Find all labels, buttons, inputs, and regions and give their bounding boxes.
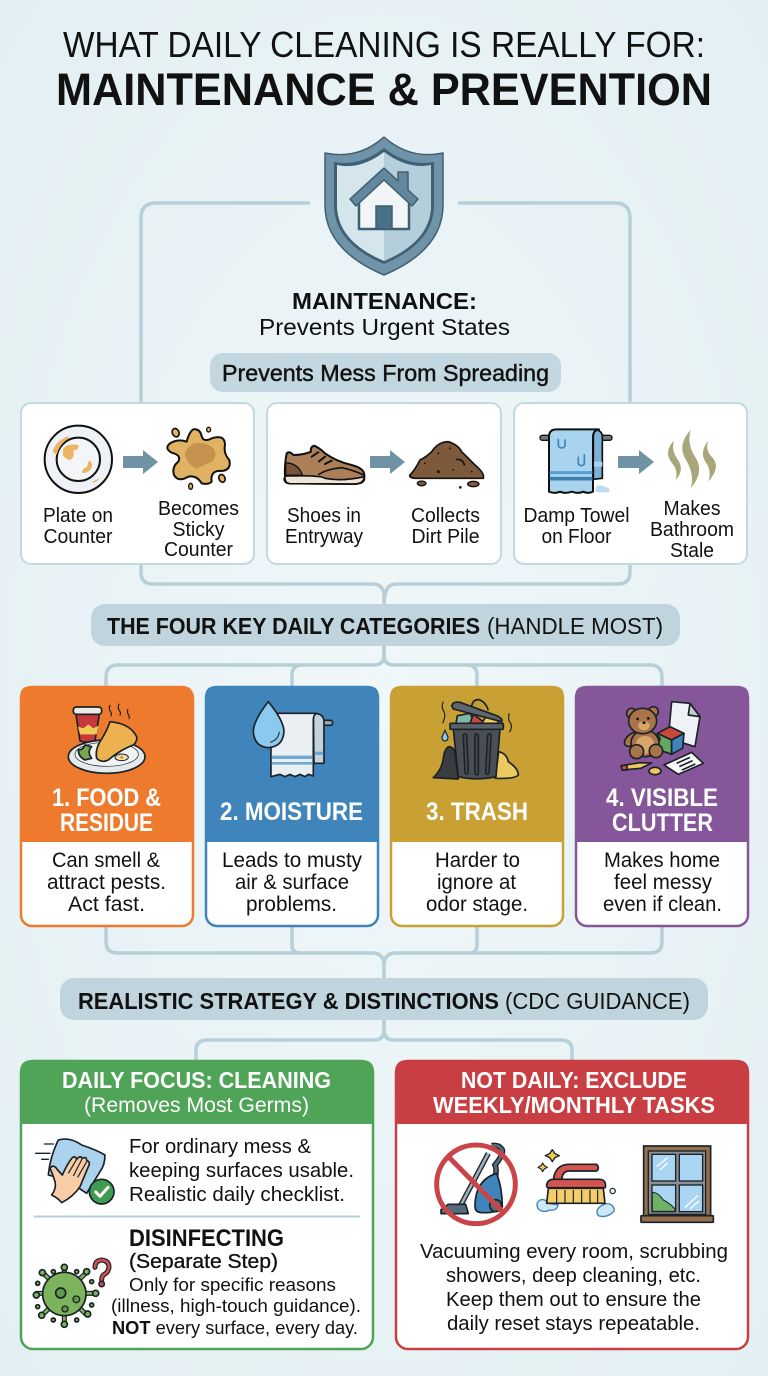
card: trash [390, 686, 564, 926]
text: plate: Counter [164, 539, 233, 561]
text: moisture title: 2. MOISTURE [220, 798, 363, 826]
text: disinfecting: NOT every surface, every day. [112, 1317, 358, 1338]
panel: daily focus cleaning [20, 1060, 374, 1349]
text: not daily description: Vacuuming every room, scrubbing [420, 1240, 728, 1263]
text: shoes: Shoes in [287, 505, 361, 527]
icon: shoe [284, 446, 364, 484]
panel: not daily [395, 1060, 749, 1349]
text: shoes: Collects [411, 505, 480, 527]
text: plate: Sticky [172, 519, 224, 541]
text: food description [47, 849, 166, 916]
text: disinfecting: Only for specific reasons [129, 1274, 336, 1295]
card: moisture [205, 686, 379, 926]
text: clutter description: feel messy [614, 871, 712, 894]
text: not daily header: NOT DAILY: EXCLUDE [461, 1067, 687, 1093]
text: food title: 1. FOOD & [52, 784, 161, 812]
icon: food plate [68, 704, 145, 773]
heading: maintenance [259, 288, 510, 340]
card: visible clutter [575, 686, 749, 926]
heading pill: realistic strategy: (CDC GUIDANCE) [505, 988, 690, 1014]
connector: strategy to panels [196, 1020, 572, 1060]
text: food title: RESIDUE [60, 809, 153, 837]
icon: window [641, 1146, 713, 1222]
icon: dirty plate [45, 426, 112, 493]
pill: prevents mess from spreading: Prevents Mess From Spreading [222, 360, 549, 386]
connector: maintenance bracket [141, 203, 630, 604]
heading pill: realistic strategy: REALISTIC STRATEGY & DISTINCTIONS [78, 988, 499, 1014]
text: towel: Damp Towel [524, 505, 630, 527]
text: disinfecting [111, 1225, 361, 1338]
text: plate: Becomes [158, 498, 239, 520]
heading: maintenance: Prevents Urgent States [259, 314, 510, 340]
text: not daily description: Keep them out to ensure the [446, 1288, 701, 1311]
title [56, 24, 712, 115]
icon: stale odor [668, 430, 716, 488]
text: food description: Act fast. [68, 893, 145, 916]
text: not daily description [420, 1240, 728, 1335]
text: moisture description [222, 849, 362, 916]
text: towel [524, 498, 734, 562]
text: not daily description: daily reset stays repeatable. [447, 1312, 700, 1335]
icon: sticky splat [167, 427, 230, 489]
icon: virus with question mark [33, 1260, 109, 1327]
text: cleaning header: (Removes Most Germs) [84, 1094, 309, 1117]
text: cleaning header: DAILY FOCUS: CLEANING [62, 1067, 331, 1093]
card: food and residue [20, 686, 193, 926]
icon: toys and papers [621, 702, 703, 775]
text: clutter title [606, 784, 718, 837]
text: cleaning description: keeping surfaces usable. [129, 1160, 354, 1182]
text: clutter title: CLUTTER [612, 809, 713, 837]
text: food title [52, 784, 161, 837]
text: trash title: 3. TRASH [426, 798, 528, 826]
text: plate: Counter [44, 526, 113, 548]
text: shoes [285, 505, 480, 548]
pill: prevents mess from spreading [210, 353, 561, 392]
icon: prohibited vacuum [437, 1145, 515, 1224]
icon: hand wiping with cloth [36, 1139, 114, 1204]
text: plate [43, 498, 239, 561]
arrow [123, 450, 158, 474]
text: trash description: Harder to [435, 849, 520, 872]
connector: categories to cards [106, 646, 662, 686]
text: clutter description: even if clean. [603, 893, 722, 916]
text: towel: Makes [664, 498, 720, 520]
heading pill: realistic strategy [60, 978, 708, 1020]
text: towel: Bathroom [650, 519, 734, 541]
icon: dirt pile [410, 442, 484, 489]
text: moisture description: air & surface [235, 871, 349, 894]
arrow [370, 450, 405, 474]
text: clutter description: Makes home [604, 849, 720, 872]
text: cleaning description [129, 1136, 354, 1206]
heading pill: four key daily categories [91, 604, 680, 646]
text: food description: Can smell & [52, 849, 160, 872]
text: not daily header [433, 1067, 715, 1118]
text: cleaning description: For ordinary mess & [129, 1136, 312, 1158]
title: WHAT DAILY CLEANING IS REALLY FOR: [63, 24, 705, 65]
icon: trash can [433, 700, 518, 779]
icon: scrub brush [537, 1150, 615, 1217]
text: clutter title: 4. VISIBLE [606, 784, 718, 812]
text: cleaning header [62, 1067, 331, 1117]
panel: towel example [514, 403, 747, 564]
connector: cards to strategy [106, 927, 662, 978]
icon: damp towel [540, 429, 612, 493]
text: moisture description: problems. [246, 893, 337, 916]
panel: plate example [21, 403, 254, 564]
text: cleaning description: Realistic daily checklist. [129, 1184, 345, 1206]
text: shoes: Dirt Pile [412, 526, 480, 548]
title: MAINTENANCE & PREVENTION [56, 64, 712, 115]
text: trash description [426, 849, 528, 916]
heading pill: four key daily categories: THE FOUR KEY DAILY CATEGORIES [107, 613, 480, 639]
heading: maintenance: MAINTENANCE: [292, 288, 477, 314]
text: plate: Plate on [43, 505, 113, 527]
text: shoes: Entryway [285, 526, 363, 548]
text: trash description: odor stage. [426, 893, 528, 916]
text: disinfecting: (illness, high-touch guidance). [111, 1295, 361, 1316]
text: trash description: ignore at [437, 871, 516, 894]
heading pill: four key daily categories: (HANDLE MOST) [487, 613, 663, 639]
panel: shoes example [267, 403, 501, 564]
text: food description: attract pests. [47, 871, 166, 894]
text: moisture description: Leads to musty [222, 849, 362, 872]
icon: shield with house [325, 137, 443, 275]
text: disinfecting: DISINFECTING [129, 1225, 284, 1252]
arrow [618, 450, 654, 474]
text: clutter description [603, 849, 722, 916]
text: not daily description: showers, deep cleaning, etc. [446, 1264, 701, 1287]
text: towel: on Floor [542, 526, 612, 548]
text: disinfecting: (Separate Step) [129, 1250, 278, 1273]
text: towel: Stale [670, 540, 714, 562]
icon: drop and towel [253, 702, 333, 777]
text: not daily header: WEEKLY/MONTHLY TASKS [433, 1092, 715, 1118]
